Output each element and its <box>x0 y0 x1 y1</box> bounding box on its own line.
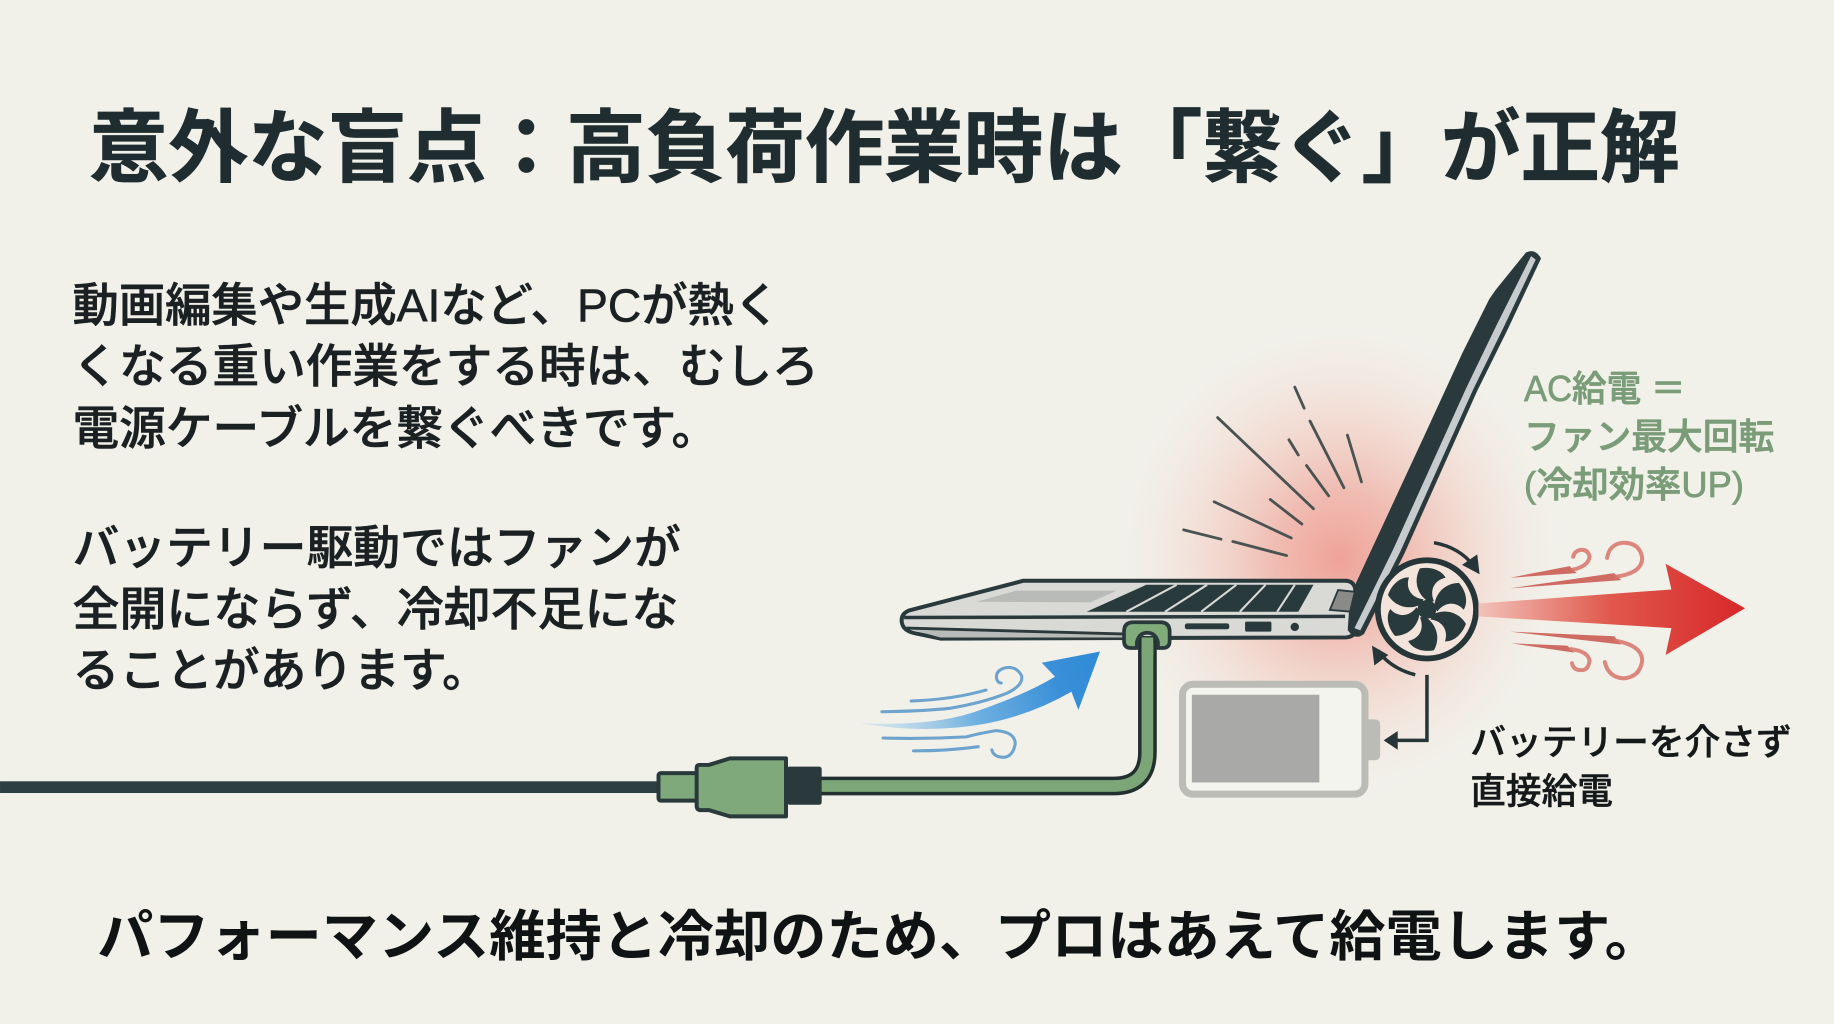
label: AC power: AC給電 ＝ <box>1524 369 1685 409</box>
text block: battery fan limits <box>73 522 681 697</box>
laptop connector <box>1124 622 1170 648</box>
hinge <box>1330 590 1355 612</box>
red exhaust arrow <box>1478 564 1745 655</box>
text block: battery fan limits: ることがあります。 <box>73 645 489 697</box>
trackpad <box>977 591 1117 602</box>
text block: heavy workloads: 電源ケーブルを繋ぐべきです。 <box>73 402 718 454</box>
text block: heavy workloads <box>73 280 819 454</box>
black cable section <box>0 781 661 793</box>
laptop base <box>902 581 1357 639</box>
ports <box>1185 623 1229 629</box>
blue wind lines <box>882 667 1022 757</box>
keyboard <box>1087 585 1314 612</box>
label: direct power: 直接給電 <box>1470 772 1613 812</box>
green cable <box>819 637 1147 786</box>
label: AC power <box>1524 369 1774 505</box>
heat glow <box>1117 325 1561 793</box>
rotation arrow: top <box>1434 543 1480 574</box>
bottom statement: パフォーマンス維持と冷却のため、プロはあえて給電します。 <box>97 906 1661 968</box>
label: direct power: バッテリーを介さず <box>1470 722 1792 762</box>
label: AC power: ファン最大回転 <box>1524 417 1774 457</box>
inline plug <box>659 773 697 801</box>
connector arrow to battery <box>1384 675 1427 750</box>
text block: heavy workloads: 動画編集や生成AIなど、PCが熱く <box>73 280 780 332</box>
red wind lines <box>1510 543 1642 678</box>
text block: battery fan limits: 全開にならず、冷却不足にな <box>73 584 678 636</box>
rotation arrow: bottom <box>1372 646 1415 675</box>
title: 意外な盲点：高負荷作業時は「繋ぐ」が正解 <box>89 103 1680 192</box>
power cable <box>0 622 1170 816</box>
screen <box>1349 252 1540 636</box>
battery <box>1183 684 1380 794</box>
text block: battery fan limits: バッテリー駆動ではファンが <box>73 522 681 574</box>
text block: heavy workloads: くなる重い作業をする時は、むしろ <box>73 340 819 392</box>
laptop <box>902 252 1540 639</box>
front edge <box>906 628 1123 637</box>
label: direct power <box>1470 722 1792 812</box>
label: AC power: (冷却効率UP) <box>1524 465 1744 505</box>
blue intake arrow <box>859 651 1100 729</box>
heat lines <box>1184 387 1361 556</box>
cooling fan <box>1378 560 1476 658</box>
